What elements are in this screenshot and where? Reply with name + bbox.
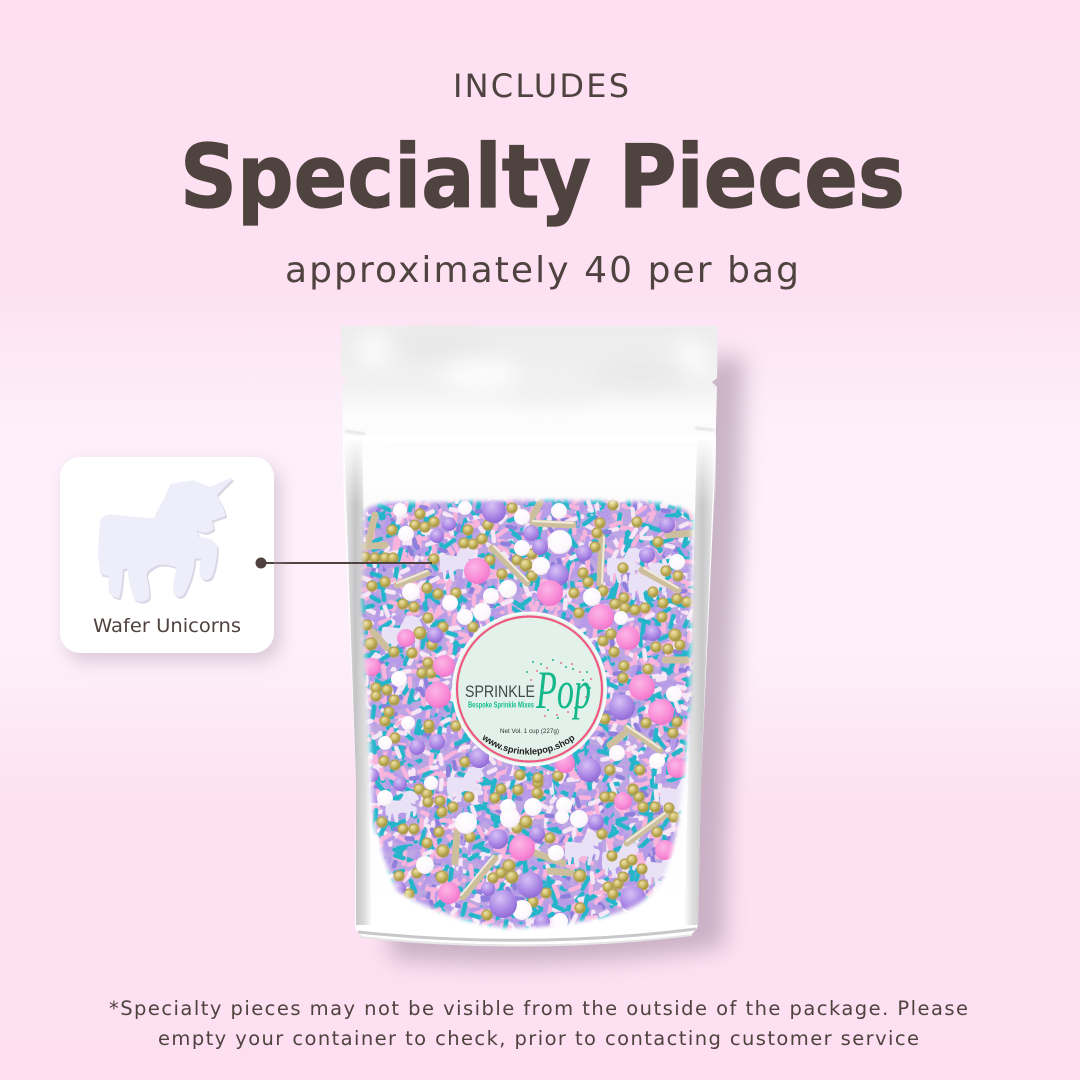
bag bottom gusset: [358, 929, 696, 940]
footnote: [109, 997, 968, 1050]
bag left window strip: [344, 440, 372, 925]
card label: Wafer Unicorns: [93, 615, 241, 637]
pink pearls: [363, 558, 687, 904]
eyebrow: includes: INCLUDES: [453, 67, 629, 105]
callout connector: [256, 558, 432, 568]
footnote: empty your container to check, prior to contacting customer service: [158, 1027, 919, 1050]
bag zip seal: [345, 428, 714, 445]
card surface: [60, 457, 274, 653]
white pearls: [377, 501, 685, 929]
brand word: pop: Pop: [535, 660, 591, 720]
bag right window strip: [684, 440, 715, 925]
website: www.sprinklepop.shop: [482, 735, 574, 756]
subtitle: approximately 40 per bag: [285, 250, 799, 291]
product bag: [341, 326, 744, 963]
confetti dots: [526, 659, 591, 719]
footnote: *Specialty pieces may not be visible from the outside of the package. Please: [109, 997, 968, 1020]
bag body: [341, 326, 718, 945]
icon: unicorn: [99, 479, 232, 602]
callout card: wafer unicorns: [60, 457, 280, 661]
bag top sheen: [359, 332, 708, 403]
sprinkle mix: [350, 490, 710, 940]
brand word: sprinkle: SPRINKLE: [465, 683, 535, 701]
wafer unicorn pieces: [381, 544, 704, 887]
strip fade: [343, 436, 716, 506]
title: Specialty Pieces: [180, 126, 905, 228]
bag shadow: [370, 357, 744, 963]
gold rods: [360, 503, 693, 897]
purple pearls: [365, 499, 675, 930]
card shadow: [66, 465, 280, 661]
label ring: [457, 616, 602, 762]
bag label: [452, 612, 607, 766]
brand tagline: Bespoke Sprinkle Mixes: [468, 700, 534, 710]
label disc: [452, 612, 607, 766]
net volume: Net Vol. 1 cup (227g): [500, 728, 559, 735]
gold balls: [360, 500, 692, 920]
